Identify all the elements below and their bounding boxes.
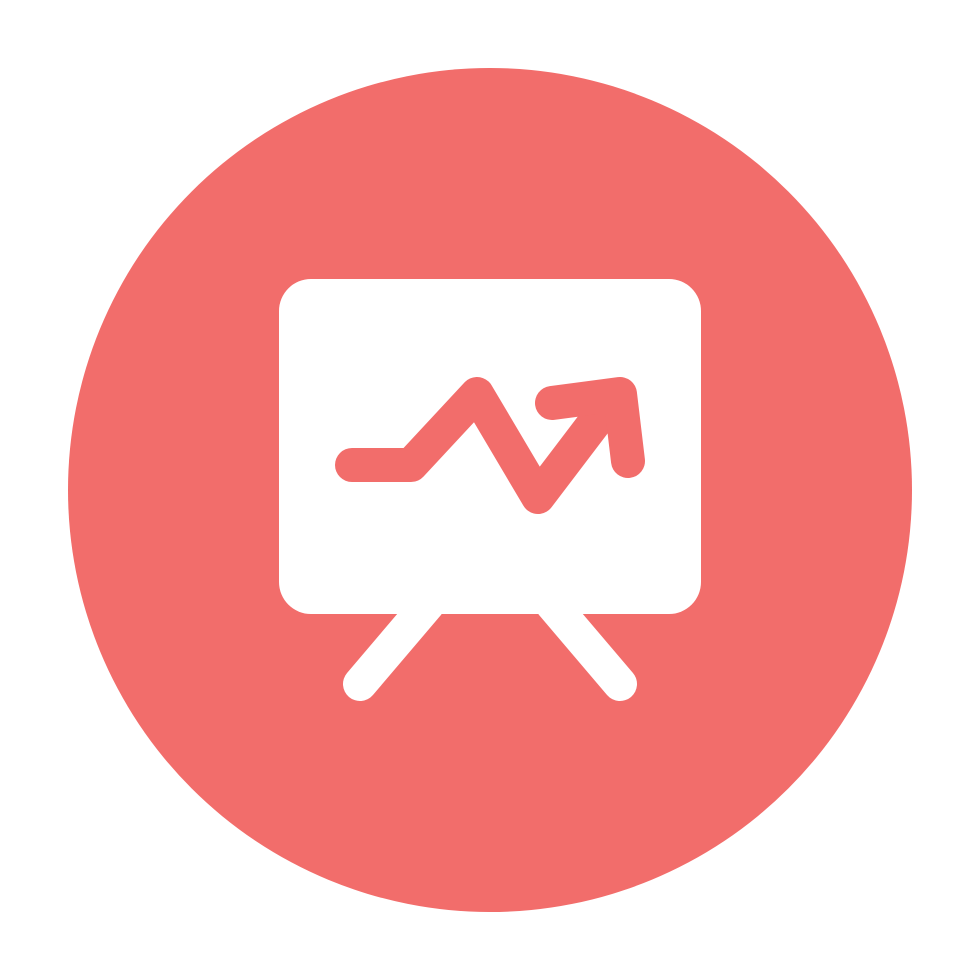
icon: easel legs <box>360 604 620 684</box>
icon: rising trend line with arrow <box>352 394 628 497</box>
red circle background <box>68 68 912 912</box>
presentation board <box>279 279 701 614</box>
